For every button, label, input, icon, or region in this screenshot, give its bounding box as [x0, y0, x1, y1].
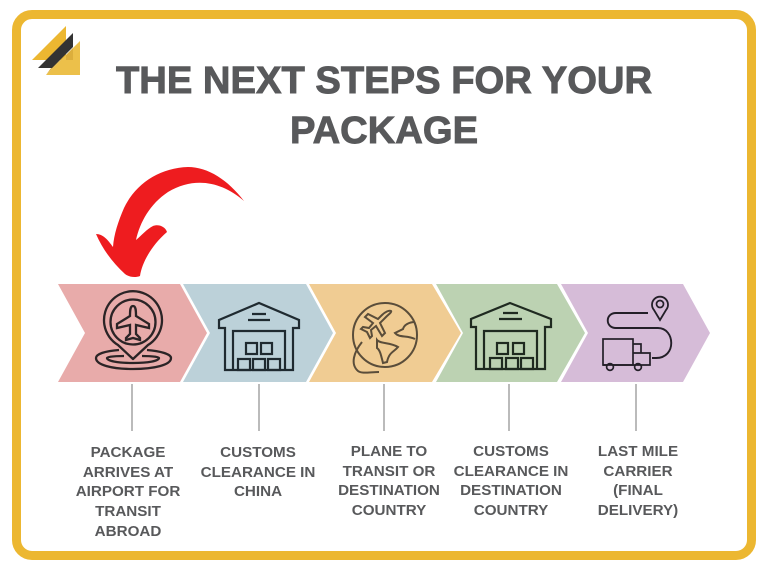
icon: warehouse 2 [471, 303, 551, 369]
icon: delivery truck with route [603, 297, 671, 370]
caption 3: COUNTRY [352, 502, 426, 519]
caption 4 [454, 443, 568, 519]
caption 4: DESTINATION [460, 482, 562, 499]
caption 1: ARRIVES AT [83, 464, 173, 481]
title: PACKAGE [290, 109, 478, 152]
caption 3: PLANE TO [351, 443, 427, 460]
caption 1 [76, 444, 180, 540]
caption 2: CUSTOMS [220, 444, 296, 461]
chevron 5 [561, 284, 710, 382]
title [116, 59, 652, 152]
title: THE NEXT STEPS FOR YOUR [116, 59, 652, 102]
chevron 4 [436, 284, 585, 382]
caption 1: AIRPORT FOR [76, 483, 180, 500]
chevron 3 [309, 284, 461, 382]
icon: logo [32, 26, 80, 75]
icon: globe with plane [353, 303, 417, 373]
caption 1: TRANSIT [95, 503, 161, 520]
caption 4: CUSTOMS [473, 443, 549, 460]
caption 3: TRANSIT OR [343, 463, 435, 480]
caption 3: DESTINATION [338, 482, 440, 499]
process chevrons [58, 284, 710, 431]
caption 1: ABROAD [95, 523, 161, 540]
caption 2: CHINA [234, 483, 282, 500]
icon: airport pin [96, 291, 171, 369]
chevron 1 [58, 284, 207, 382]
icon: warehouse 1 [219, 303, 299, 370]
caption 4: COUNTRY [474, 502, 548, 519]
caption 5: (FINAL [613, 482, 663, 499]
connector lines [132, 384, 636, 431]
caption 3 [338, 443, 440, 519]
caption 5: DELIVERY) [598, 502, 678, 519]
caption 5: CARRIER [603, 463, 673, 480]
caption 5: LAST MILE [598, 443, 678, 460]
caption 5 [598, 443, 678, 519]
caption 1: PACKAGE [91, 444, 165, 461]
caption 2 [201, 444, 315, 500]
caption 4: CLEARANCE IN [454, 463, 568, 480]
chevron 2 [183, 284, 333, 382]
arrow: red curved arrow [96, 167, 244, 277]
caption 2: CLEARANCE IN [201, 464, 315, 481]
